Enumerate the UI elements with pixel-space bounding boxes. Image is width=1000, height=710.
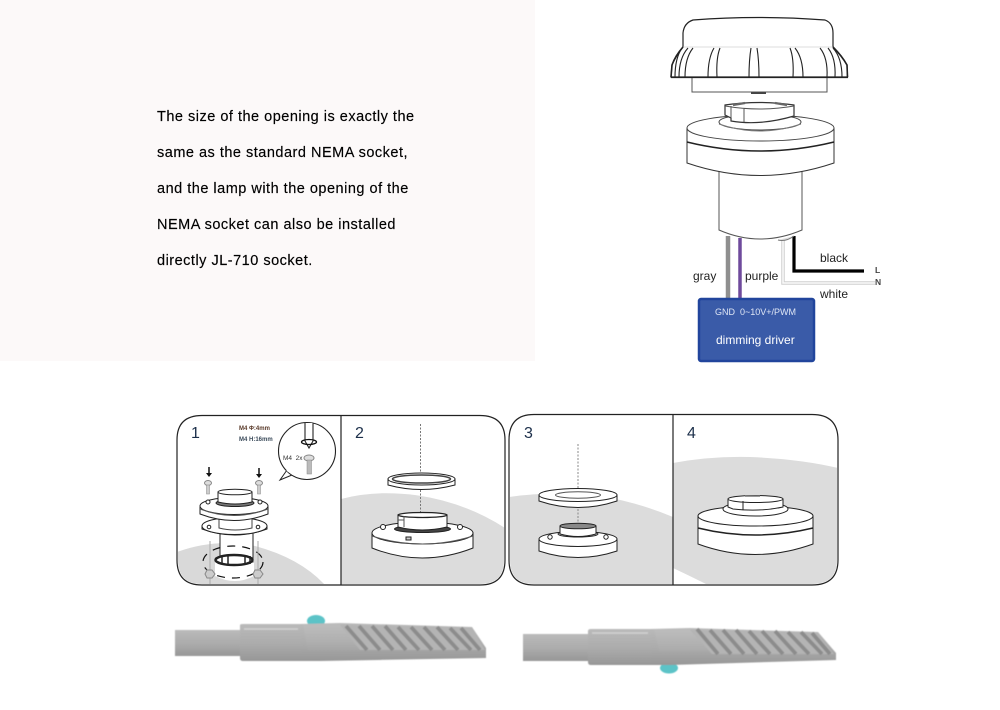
wire: gray xyxy=(726,236,730,298)
text block: description: and the lamp with the opening of the xyxy=(157,181,409,197)
callout label: screw count: M4 2x xyxy=(283,455,303,462)
cord xyxy=(175,630,241,656)
dashed alignment ring xyxy=(203,546,263,578)
lamp cap xyxy=(671,18,848,93)
cable connector: button on top xyxy=(175,615,486,661)
screw diameter spec: M4 Φ:4mm xyxy=(239,426,270,432)
driver terminals label: GND 0~10V+/PWM xyxy=(715,307,796,317)
wire label: purple: purple xyxy=(745,269,779,283)
driver name: dimming driver xyxy=(716,333,795,347)
screws with arrows xyxy=(204,467,262,494)
grip ribs xyxy=(346,626,480,650)
ring xyxy=(388,473,455,490)
step number 1: 1 xyxy=(191,425,200,442)
collar xyxy=(588,629,652,665)
wire label: black: black xyxy=(820,251,849,265)
text block: description xyxy=(157,109,415,269)
cable connector: button below xyxy=(523,628,836,674)
step number 2: 2 xyxy=(355,425,364,442)
terminal label: L: L xyxy=(875,265,880,275)
ring xyxy=(539,488,617,508)
text block: description: The size of the opening is exactly the xyxy=(157,109,415,125)
body xyxy=(650,628,836,665)
assembled socket xyxy=(698,496,813,554)
step number 3: 3 xyxy=(524,425,533,442)
lamp and wiring diagram xyxy=(671,18,875,298)
wire label: gray: gray xyxy=(693,269,716,283)
socket xyxy=(539,523,617,558)
mounting nuts and rods xyxy=(205,541,263,584)
terminal label: N: N xyxy=(875,277,881,287)
teal button xyxy=(307,615,325,627)
callout bubble with screwdriver xyxy=(278,422,336,480)
exploded socket assembly xyxy=(200,489,268,565)
panel: steps 3 and 4 xyxy=(509,414,838,585)
grip ribs xyxy=(697,629,830,654)
dimming driver box xyxy=(699,299,814,361)
cord xyxy=(523,634,589,661)
text block: description: NEMA socket can also be installed xyxy=(157,217,396,233)
wire label: white: white xyxy=(819,287,848,301)
panel frame xyxy=(509,414,838,585)
panel: steps 1 and 2 xyxy=(177,416,505,585)
step 3 xyxy=(509,444,673,585)
wire: white xyxy=(783,240,875,283)
step 2 xyxy=(341,424,505,585)
text block: description: directly JL-710 socket. xyxy=(157,253,313,269)
teal button xyxy=(660,662,678,674)
socket flange and body xyxy=(687,102,834,240)
step number 4: 4 xyxy=(687,425,696,442)
text block: description: same as the standard NEMA socket, xyxy=(157,145,408,161)
wire: purple xyxy=(738,238,742,298)
panel: description background xyxy=(0,0,535,361)
body xyxy=(300,623,486,661)
step 4 xyxy=(673,457,838,585)
socket xyxy=(372,512,473,558)
wire: black xyxy=(794,236,864,271)
collar xyxy=(240,624,302,661)
step 1 xyxy=(177,422,336,585)
panel frame xyxy=(177,416,505,585)
screw height spec: M4 H:16mm xyxy=(239,437,273,443)
